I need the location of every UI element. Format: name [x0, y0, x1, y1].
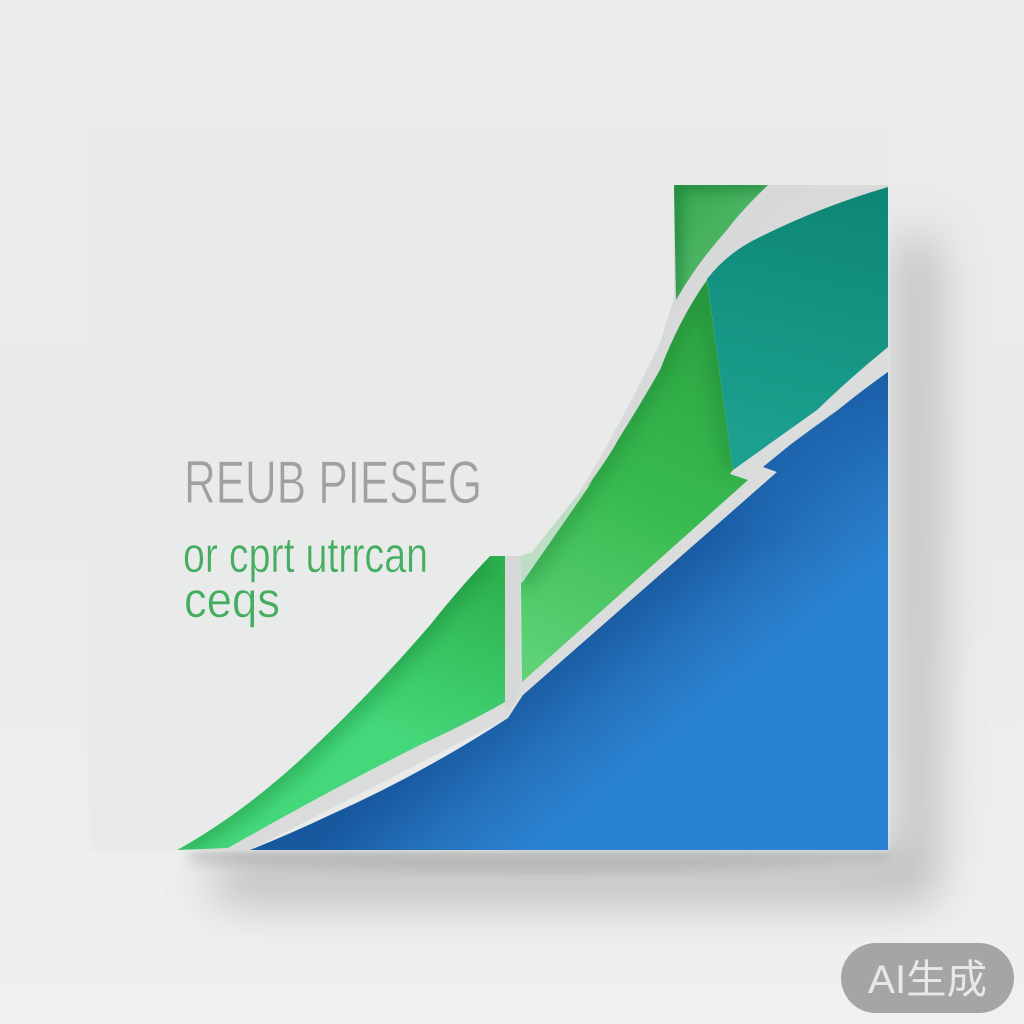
page edge: light paper covering upper left [90, 130, 674, 850]
area: left green layer [177, 556, 505, 850]
panel shadow [190, 230, 935, 900]
badge: AI generated: AI生成 [868, 958, 987, 1002]
subheading text: ceqs [184, 572, 280, 628]
vertical divider strip [505, 556, 520, 710]
white panel [90, 130, 888, 850]
subheading text: or cprt utrrcan [183, 527, 428, 583]
area: middle green layer [521, 280, 748, 682]
area: top green layer [674, 185, 768, 300]
area: teal layer [707, 187, 888, 470]
recessed white backing [178, 185, 888, 850]
area: blue layer [250, 372, 888, 850]
flap: pale green fold [520, 482, 592, 583]
subheading text [183, 527, 428, 628]
badge: AI generated [841, 943, 1014, 1013]
chart: layered area shapes [177, 185, 888, 850]
infographic canvas [177, 185, 1014, 1013]
heading text: REUB PIESEG [184, 449, 482, 516]
